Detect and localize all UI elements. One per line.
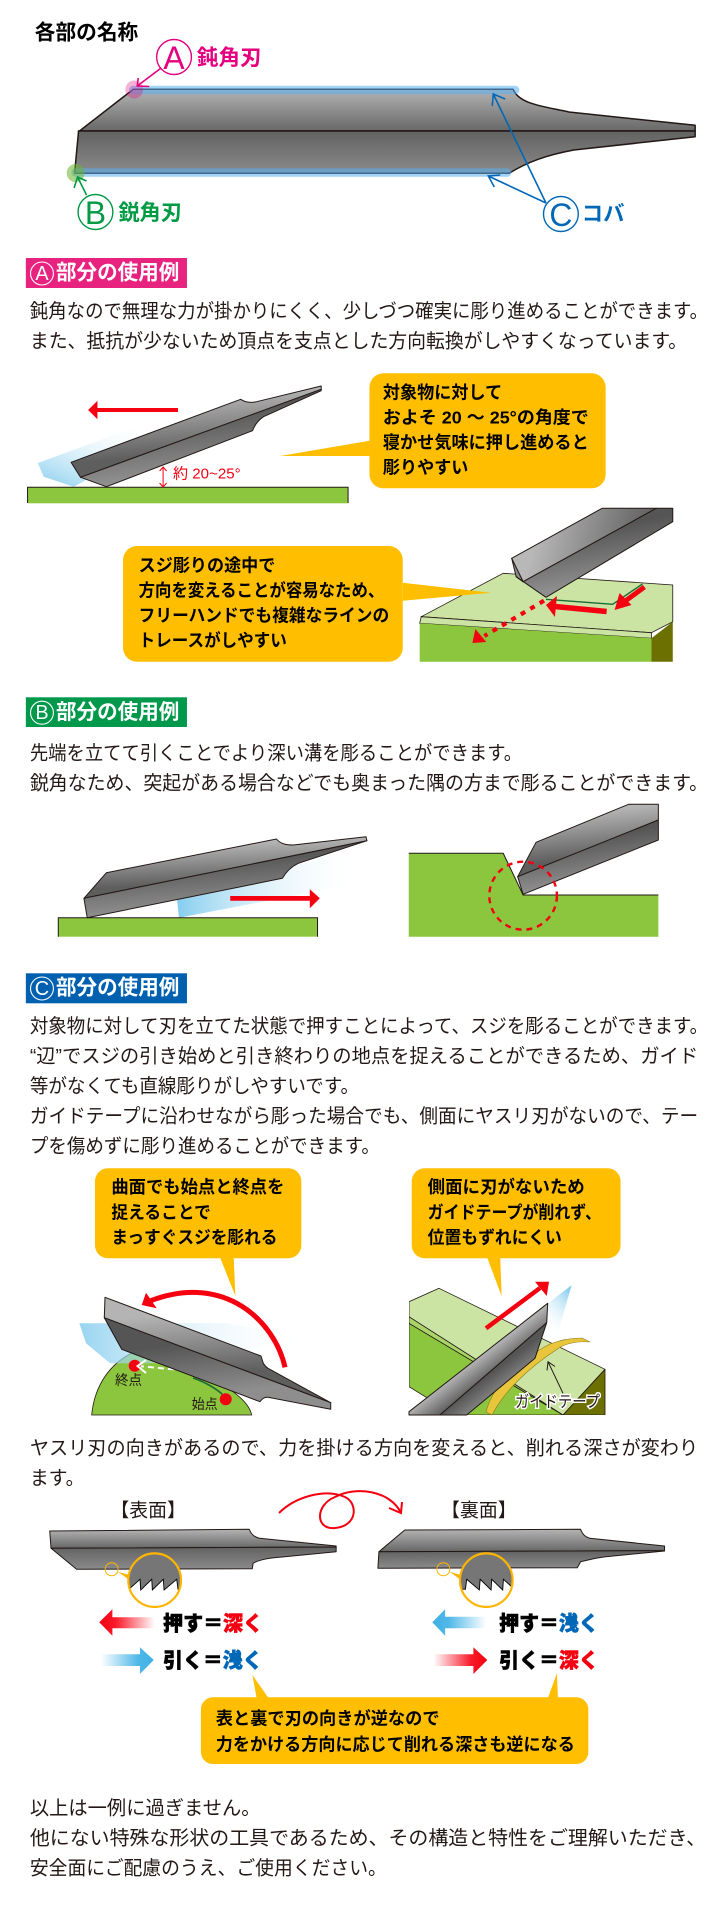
motion swoosh: [79, 1323, 307, 1363]
red arrow: pull direction: [230, 889, 320, 908]
label: start point: 始点: [192, 1396, 218, 1412]
block: top face: [409, 1288, 605, 1415]
arrow: to corner A: [137, 68, 161, 86]
block: side face: [651, 622, 673, 662]
callout: guide tape: [412, 1168, 621, 1296]
illustration: curved surface: [79, 1292, 331, 1415]
highlight: corner A: [125, 80, 143, 98]
red curved arrow: [142, 1292, 285, 1367]
callout: reversed teeth: 力をかける方向に応じて削れる深さも逆になる: [216, 1734, 575, 1754]
start point dot: [220, 1393, 232, 1405]
illustration: changing direction on a block: [420, 508, 673, 662]
white arrow head: [137, 1360, 146, 1373]
text block B: 先端を立てて引くことでより深い溝を彫ることができます。: [30, 742, 522, 764]
text block C: ガイドテープに沿わせながら彫った場合でも、側面にヤスリ刃がないので、テー: [30, 1106, 698, 1128]
callout: curved surface: [95, 1168, 301, 1296]
title: 各部の名称: [35, 20, 138, 45]
section heading C: [26, 973, 187, 1003]
text block A: また、抵抗が少ないため頂点を支点とした方向転換がしやすくなっています。: [30, 331, 687, 353]
arrow: to top edge: [492, 94, 546, 203]
motion swoosh: [177, 850, 360, 918]
section heading A: [26, 258, 187, 288]
text block: file direction: [30, 1437, 698, 1489]
callout: curved surface: まっすぐスジを彫れる: [111, 1227, 277, 1247]
text: back pull: 引く＝深く: [499, 1649, 599, 1672]
text block C: [30, 1016, 708, 1158]
section heading B: [26, 697, 187, 727]
callout: reversed teeth: 表と裏で刃の向きが逆なので: [216, 1708, 440, 1728]
label B: B: [85, 195, 106, 231]
label B: 鋭角刃: [118, 201, 182, 225]
angle marker: 約 20~25°: [173, 465, 241, 483]
scribed groove: [546, 584, 642, 604]
callout: direction change: フリーハンドでも複雑なラインの: [139, 606, 389, 626]
callout: angle: 寝かせ気味に押し進めると: [383, 432, 589, 452]
arrow: back push: [432, 1609, 486, 1636]
label C: C: [549, 197, 572, 233]
guide tape: [486, 1338, 590, 1415]
file: [84, 837, 367, 918]
callout: angle: [280, 373, 606, 488]
label: end point: 終点: [115, 1372, 142, 1388]
section heading C: 部分の使用例: [56, 976, 179, 1000]
green raised work piece: [409, 853, 658, 937]
text block: file direction: ます。: [30, 1467, 85, 1489]
file: [71, 386, 321, 487]
label: front side: 【表面】: [110, 1499, 186, 1522]
section heading B: 部分の使用例: [56, 701, 179, 724]
block: front face: [420, 623, 651, 662]
file: front side: [50, 1529, 336, 1569]
red arrow: push direction: [88, 401, 178, 419]
motion swoosh: [38, 413, 199, 487]
block: [409, 1288, 605, 1415]
arrow: front pull: [101, 1647, 154, 1674]
callout: direction change: [123, 546, 491, 662]
file: [104, 1297, 331, 1409]
file body: [75, 89, 695, 173]
label C: [543, 196, 625, 233]
text block: closing note: 他にない特殊な形状の工具であるため、その構造と特性をご理解いただき、: [30, 1827, 706, 1849]
callout: angle: およそ 20 ～ 25°の角度で: [383, 407, 589, 427]
text block C: プを傷めずに彫り進めることができます。: [30, 1136, 380, 1158]
illustration: guide tape: [409, 1282, 605, 1415]
text: front pull: 引く＝浅く: [163, 1648, 263, 1672]
red arrow: motion: [486, 1282, 549, 1328]
green work surface: [58, 918, 318, 937]
file: [409, 1303, 548, 1415]
block: side face: [563, 1369, 605, 1415]
curly arrow: flip over: [279, 1491, 402, 1528]
text block A: [30, 301, 708, 353]
callout: direction change: トレースがしやすい: [139, 631, 287, 651]
label A: A: [163, 40, 185, 76]
dashed red circle: [489, 862, 557, 930]
callout: guide tape: 位置もずれにくい: [428, 1227, 562, 1247]
text: back push: 押す＝浅く: [499, 1611, 599, 1635]
section heading B: B: [35, 702, 49, 724]
callout: curved surface: 曲面でも始点と終点を: [111, 1177, 284, 1197]
green dome: [92, 1352, 252, 1415]
diagram: parts of the file: [67, 40, 695, 233]
text block: closing note: 安全面にご配慮のうえ、ご使用ください。: [30, 1857, 387, 1879]
callout: angle: 彫りやすい: [383, 457, 468, 477]
callout: guide tape: ガイドテープが削れず、: [428, 1202, 601, 1222]
text block C: 等がなくても直線彫りがしやすいです。: [30, 1076, 359, 1098]
block: top face: [421, 573, 673, 633]
arrow: back pull: [434, 1647, 487, 1674]
label: back side: 【裏面】: [441, 1499, 517, 1522]
file: back side: [378, 1529, 665, 1568]
callout: reversed teeth: [201, 1673, 588, 1764]
callout: guide tape: 側面に刃がないため: [428, 1177, 585, 1197]
block: chamfer: [420, 617, 651, 638]
highlight: edge C bottom: [76, 168, 507, 177]
text block B: [30, 742, 708, 794]
callout: curved surface: 捉えることで: [111, 1202, 211, 1222]
label: guide tape: ガイドテープ: [515, 1393, 600, 1411]
magnifier: front teeth: [105, 1550, 183, 1607]
text block B: 鋭角なため、突起がある場合などでも奥まった隅の方まで彫ることができます。: [30, 772, 708, 794]
scribed groove: [193, 1378, 223, 1395]
red arrow: turning stroke: [555, 606, 607, 612]
motion swoosh: [547, 1285, 572, 1337]
red dotted arrow: [484, 601, 544, 636]
magnifier: back teeth: [437, 1550, 517, 1607]
callout: direction change: スジ彫りの途中で: [139, 556, 275, 576]
label A: [157, 40, 262, 76]
illustration: pulling the file: [58, 837, 367, 937]
text block C: “辺”でスジの引き始めと引き終わりの地点を捉えることができるため、ガイド: [30, 1046, 698, 1068]
label C: コバ: [582, 202, 625, 226]
section heading A: 部分の使用例: [56, 261, 179, 285]
red arrow: first stroke: [623, 587, 644, 603]
block: chamfer strip: [409, 1317, 563, 1415]
file: [518, 804, 658, 894]
illustration: tip reaching into a corner: [409, 804, 658, 937]
arrow: to bottom edge: [488, 175, 546, 203]
file: [512, 508, 673, 597]
green work surface: [28, 487, 348, 503]
text block: file direction: ヤスリ刃の向きがあるので、力を掛ける方向を変えると、削れる深さが変わり: [30, 1437, 698, 1459]
arrow: to guide tape: [547, 1362, 563, 1393]
arrow: to corner B: [74, 177, 87, 195]
end point dot: [129, 1360, 141, 1372]
label B: [78, 194, 182, 231]
callout: angle: 対象物に対して: [383, 382, 502, 402]
section heading C: C: [35, 978, 49, 1000]
text: front push: 押す＝深く: [163, 1612, 263, 1635]
arrow: front push: [99, 1609, 155, 1636]
highlight: corner B: [67, 164, 85, 182]
text block: closing note: 以上は一例に過ぎません。: [30, 1797, 261, 1819]
label A: 鈍角刃: [197, 46, 262, 70]
angle marker: [160, 465, 241, 487]
block: front face: [409, 1323, 563, 1415]
callout: direction change: 方向を変えることが容易なため、: [139, 581, 384, 601]
text block: closing note: [30, 1797, 706, 1879]
white dashed path: [138, 1366, 175, 1370]
illustration: pushing file at 20-25 degrees: [28, 386, 348, 503]
highlight: edge C top: [133, 86, 515, 94]
section heading A: A: [35, 263, 49, 285]
